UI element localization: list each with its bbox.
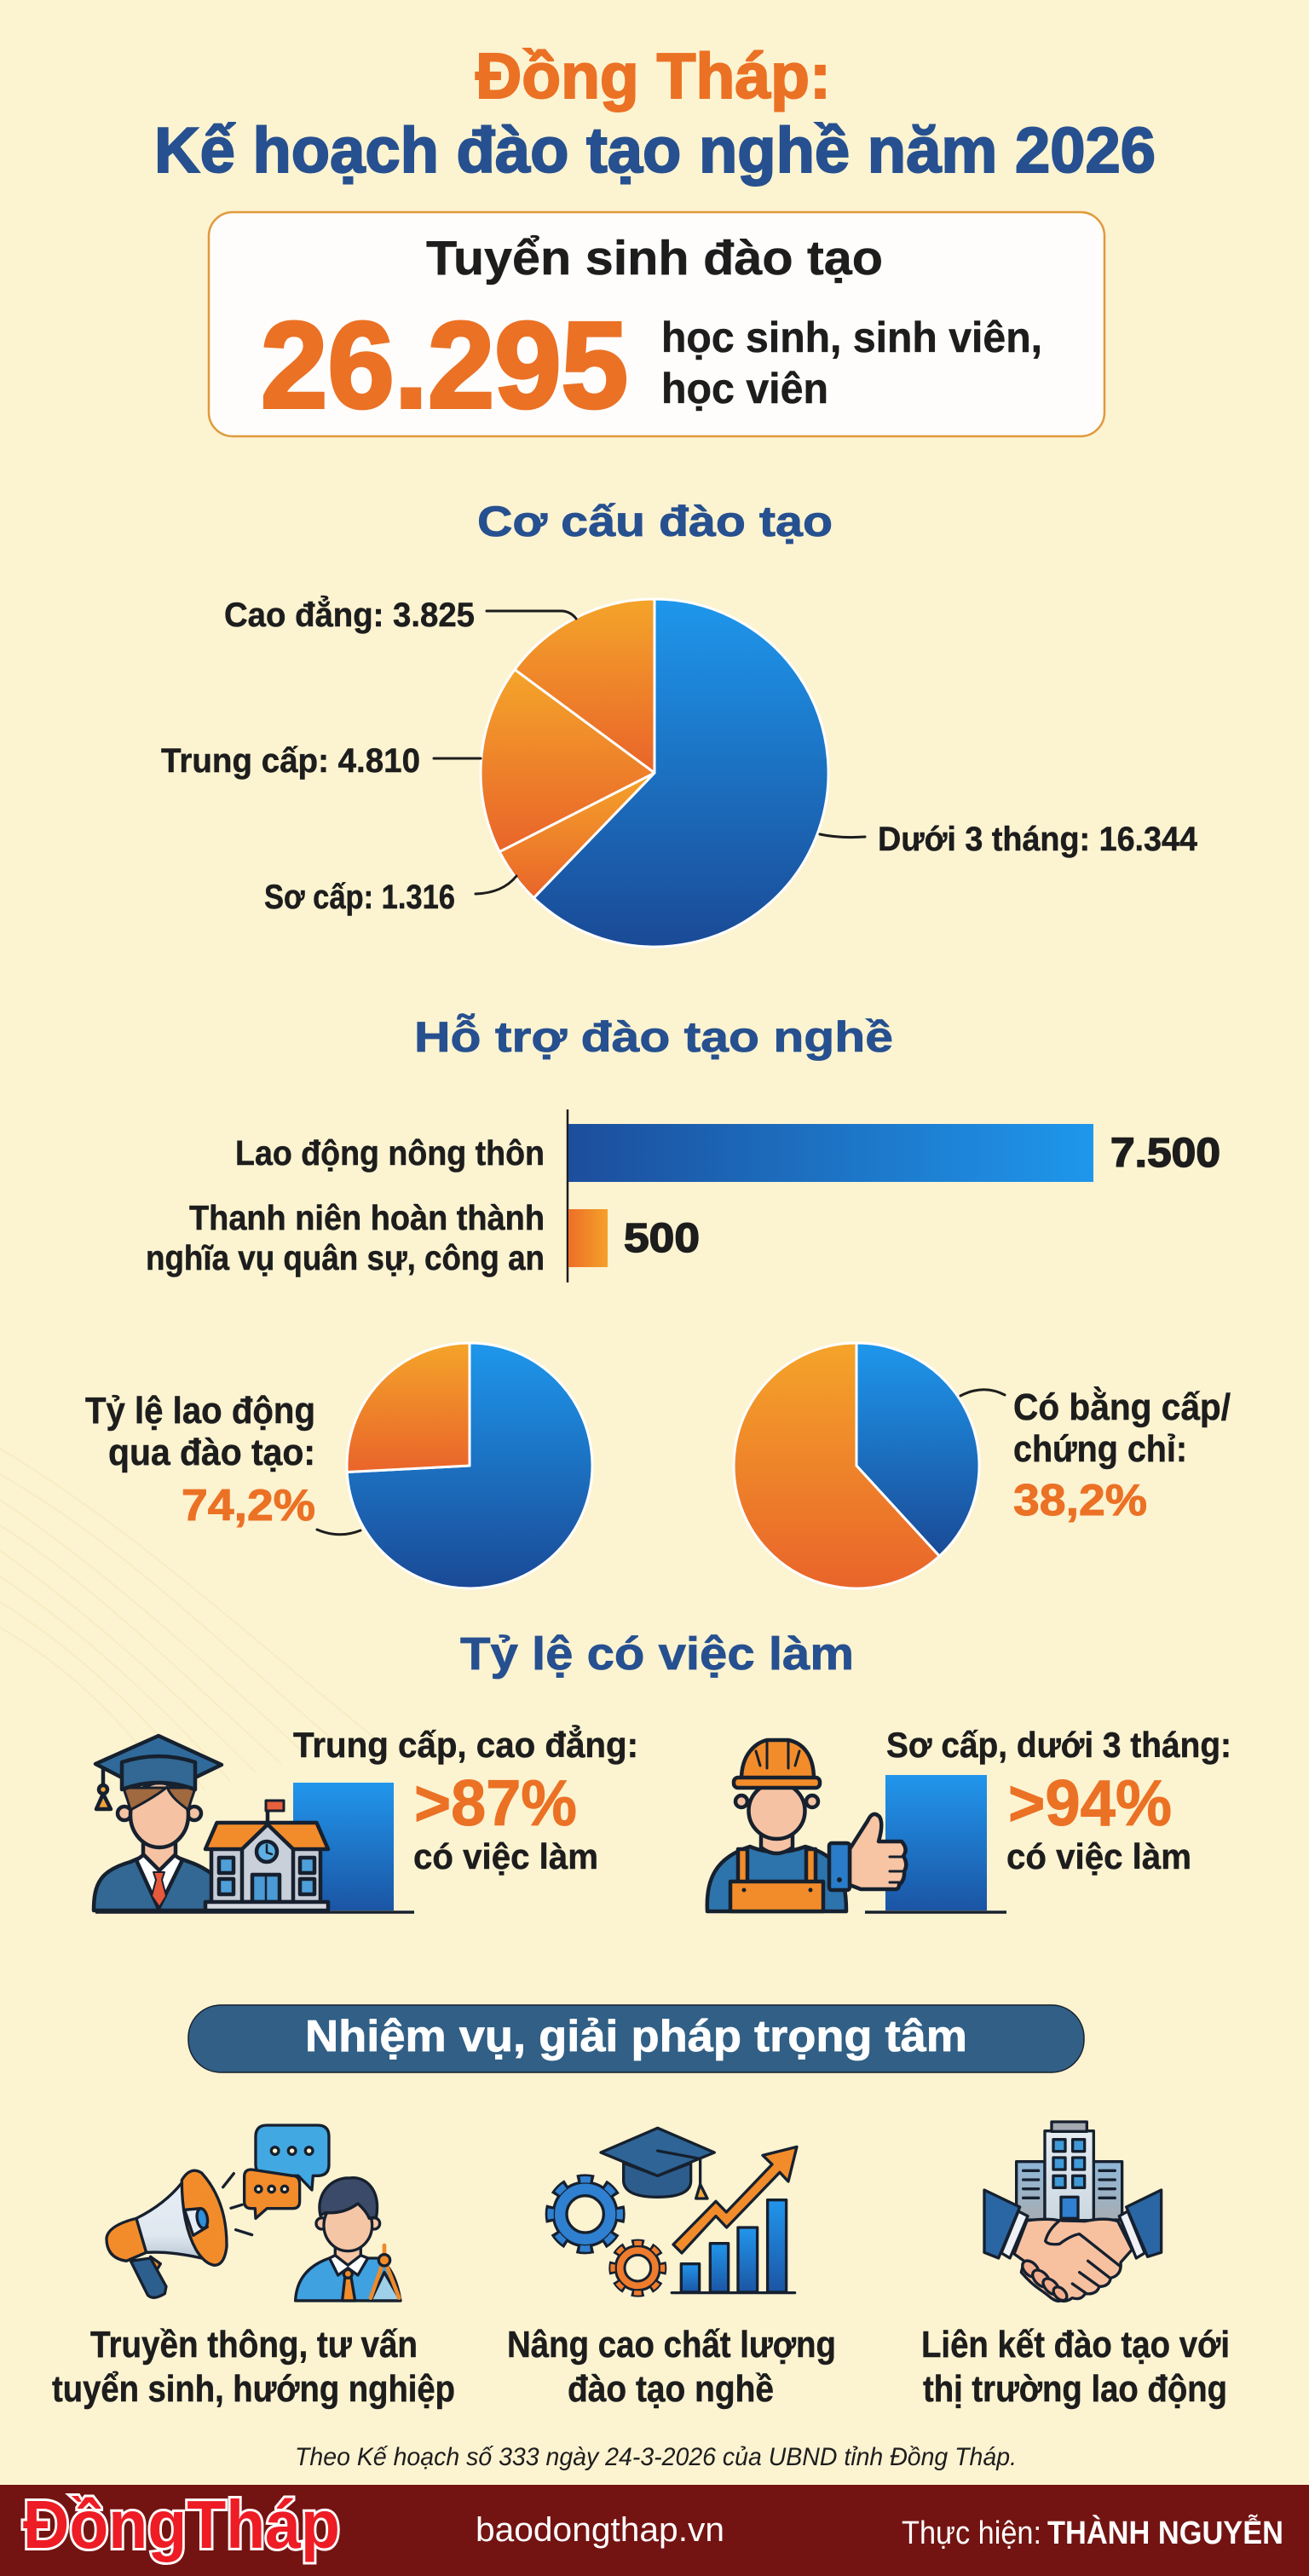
icon: handshake and buildings [984,2122,1162,2302]
credit: Thực hiện: [902,2515,1041,2551]
unit label: học sinh, sinh viên, [661,314,1042,361]
label: trained labour rate: 74,2% [182,1481,315,1530]
label: elementary: Sơ cấp: 1.316 [264,879,455,916]
title line 1: Đồng Tháp: [476,40,831,112]
slice: under 3 months [533,599,828,947]
credit: THÀNH NGUYỄN [1047,2514,1283,2551]
icon: gears cap and growth chart [551,2128,797,2293]
caption: communication and counseling [52,2324,455,2410]
value: rural workers: 7.500 [1110,1131,1220,1176]
category: youth after service: Thanh niên hoàn thành [189,1198,545,1237]
label: trained labour rate: qua đào tạo: [108,1432,315,1473]
label: certificate rate: 38,2% [1013,1476,1147,1525]
bar: rural workers [568,1124,1093,1182]
bar chart: training support [146,1109,1220,1282]
source note: Theo Kế hoạch số 333 ngày 24-3-2026 của UBND tỉnh Đồng Tháp. [295,2443,1017,2471]
pie chart: training structure [481,599,828,947]
banner: key tasks: Nhiệm vụ, giải pháp trọng tâm [305,2012,967,2061]
label: intermediate: Trung cấp: 4.810 [161,742,420,780]
website: baodongthap.vn [476,2511,724,2549]
category label: Sơ cấp, dưới 3 tháng: [886,1725,1231,1765]
pie chart: certificate rate [734,1343,979,1588]
panel: enrollment total [209,212,1104,436]
label: trained labour rate: Tỷ lệ lao động [85,1390,315,1432]
big gear [551,2180,620,2249]
baseline [865,1910,1006,1914]
caption: có việc làm [1006,1836,1191,1876]
category: youth after service: nghĩa vụ quân sự, công an [146,1238,545,1277]
heading: training structure: Cơ cấu đào tạo [477,498,833,545]
label: certificate rate: Có bằng cấp/ [1013,1386,1231,1428]
value: youth after service: 500 [624,1216,700,1261]
slice: elementary [499,773,654,898]
footer band [0,2485,1309,2576]
percentage: >94% [1008,1767,1172,1840]
bar: 94 percent [885,1775,987,1910]
pie chart: trained labour rate [347,1343,592,1588]
caption: labour market links: Liên kết đào tạo với [921,2324,1230,2366]
heading: vocational training support: Hỗ trợ đào tạo nghề [414,1013,893,1061]
icon: school [205,1801,328,1910]
card background [209,212,1104,436]
unit label [661,314,1042,412]
banner: key tasks [188,2005,1084,2072]
caption: có việc làm [413,1836,598,1876]
title line 2: Kế hoạch đào tạo nghề năm 2026 [154,114,1156,186]
baseline [95,1910,414,1914]
heading: employment rate: Tỷ lệ có việc làm [460,1628,854,1680]
bar: 87 percent [293,1783,394,1910]
title [154,40,1156,186]
caption: communication and counseling: tuyển sinh, hướng nghiệp [52,2368,455,2410]
bar: youth after service [568,1209,608,1267]
caption: labour market links: thị trường lao động [923,2368,1227,2410]
category: rural workers: Lao động nông thôn [235,1133,545,1173]
category label: Trung cấp, cao đẳng: [293,1723,638,1765]
caption: communication and counseling: Truyền thông, tư vấn [90,2324,418,2366]
big number: 26.295 [261,297,628,434]
footer [0,2485,1309,2576]
icon: megaphone and counselor [107,2125,401,2301]
label: under 3 months: Dưới 3 tháng: 16.344 [878,821,1198,858]
caption: training quality [507,2324,836,2410]
caption: training quality: Nâng cao chất lượng [507,2324,836,2366]
category: youth after service [146,1198,545,1277]
small gear [613,2243,663,2293]
slice: intermediate [481,670,654,852]
label: college [224,594,576,634]
unit label: học viên [661,365,828,412]
axis [567,1109,568,1282]
caption: training quality: đào tạo nghề [568,2368,774,2410]
panel: employment elementary and short courses [707,1725,1231,1912]
label: certificate rate [960,1386,1231,1525]
percentage: >87% [414,1767,577,1840]
slice: college [515,599,654,773]
icon: graduate [94,1736,223,1910]
panel: employment intermediate and college [94,1723,638,1912]
caption: labour market links [921,2324,1230,2410]
label: trained labour rate [85,1390,360,1535]
logo: ĐồngTháp [23,2487,340,2562]
card heading: Tuyển sinh đào tạo [426,231,883,285]
icon: worker [707,1740,906,1911]
label: certificate rate: chứng chỉ: [1013,1428,1187,1470]
label: college: Cao đẳng: 3.825 [224,594,475,634]
credit [902,2514,1283,2551]
